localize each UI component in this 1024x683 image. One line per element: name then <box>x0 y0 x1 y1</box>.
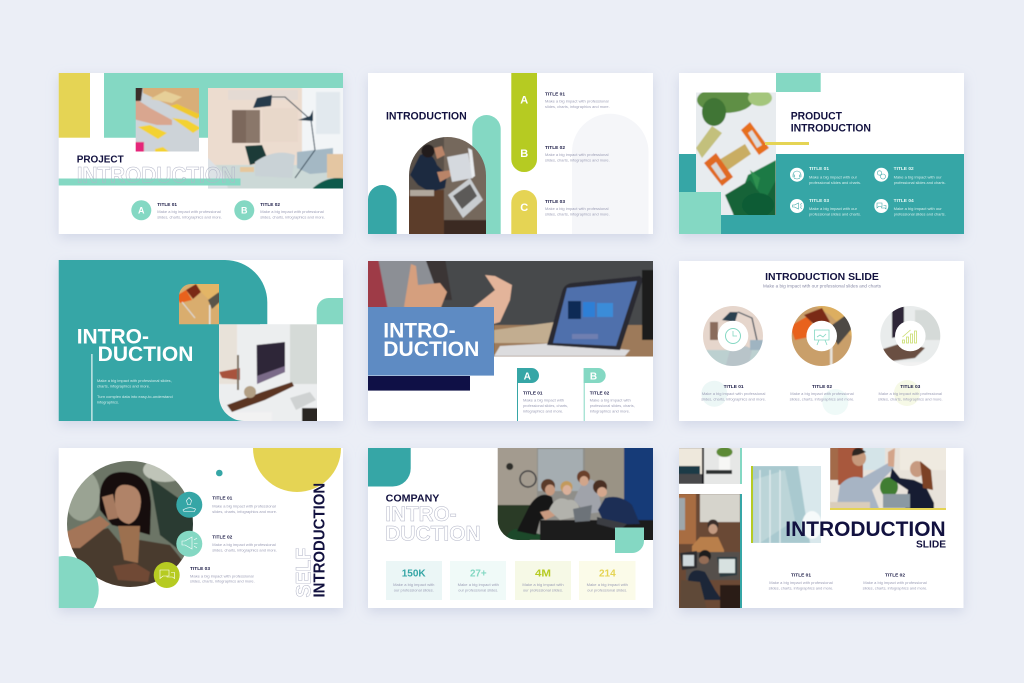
yellow block <box>59 73 90 138</box>
item: title 02: Make a big impact with professional <box>790 391 854 396</box>
item: title 01: Make a big impact with professional <box>157 209 221 214</box>
teal band <box>679 154 964 234</box>
teal dot <box>216 470 223 476</box>
stat card: 27+ <box>450 561 506 600</box>
stat card: 150K <box>386 561 442 600</box>
item: title 03: TITLE 03 <box>900 384 921 389</box>
heading: company intro-duction: COMPANY <box>386 494 440 505</box>
mint block <box>104 73 343 138</box>
heading: INTRODUCTION <box>386 111 467 123</box>
photo: laptop and plant <box>679 448 740 484</box>
heading: PRODUCT <box>791 110 842 122</box>
navy block <box>368 376 470 391</box>
body text: charts, infographics and more. <box>97 383 150 388</box>
heading: outlined introduction: INTRODUCTION <box>77 162 236 187</box>
item: title 02: Make a big impact with professional <box>212 542 276 547</box>
item A text: TITLE 01 <box>523 390 543 396</box>
mint top block <box>776 73 821 92</box>
item: title 02 with gears icon: Make a big impact with our <box>894 174 942 180</box>
item: title 02: slides, charts, infographics and more. <box>790 396 854 402</box>
item A flag <box>517 368 539 421</box>
pill letters: A <box>520 94 528 106</box>
mint stripe <box>740 448 742 484</box>
item: title 02: TITLE 02 <box>812 384 832 389</box>
heading: intro-duction: DUCTION <box>383 338 479 361</box>
stat card: 4M <box>515 561 571 600</box>
item: title 03: slides, charts, infographics and more. <box>545 211 610 216</box>
item: title 02 with gears icon <box>874 166 946 185</box>
subheading: Make a big impact with our professional slides and charts <box>763 283 882 288</box>
item B text: infographics and more. <box>590 408 630 413</box>
item: title 01 with headset icon: TITLE 01 <box>809 166 829 171</box>
mint corner block <box>317 298 343 324</box>
item: title 02: TITLE 02 <box>885 572 905 578</box>
stat card: 150K: 150K <box>402 568 426 579</box>
slide 8 card <box>368 448 653 608</box>
yellow circle <box>253 448 341 492</box>
mint arch <box>472 115 501 234</box>
photo: sticky notes <box>136 88 199 152</box>
item: title 02: TITLE 02 <box>260 202 280 207</box>
heading: intro-duction: DUCTION <box>98 343 193 366</box>
item A text: infographics and more. <box>523 408 563 413</box>
item A flag: A <box>524 372 531 382</box>
item: title 02 <box>212 534 277 552</box>
lime pill <box>511 73 537 172</box>
stat card: 214: our professional slides. <box>587 587 627 592</box>
item: title 01: TITLE 01 <box>724 384 744 389</box>
photo: desk with monitor <box>219 324 317 421</box>
pill letters <box>520 94 528 214</box>
yellow accent bar <box>765 142 809 145</box>
teal corner block <box>368 448 411 486</box>
panel: slide 1 project introduction <box>59 73 346 234</box>
item: title 03 with megaphone icon: TITLE 03 <box>809 198 829 203</box>
item: title 01 <box>157 202 222 219</box>
heading: intro-duction <box>77 325 193 366</box>
item: title 02: slides, charts, infographics and more. <box>545 158 610 162</box>
item: title 01: TITLE 01 <box>545 91 565 96</box>
item: title 03: TITLE 03 <box>545 199 565 204</box>
pill letters: C <box>520 202 528 214</box>
slide 3 card <box>679 73 964 234</box>
body text: Turn complex data into easy-to-understand <box>97 394 173 399</box>
white vertical rule <box>91 354 92 421</box>
stat card: 214 <box>579 561 636 600</box>
item: title 03: Make a big impact with professional <box>190 573 254 578</box>
badge B: B <box>241 206 248 216</box>
item: title 01 <box>701 384 766 402</box>
stat card: 4M: Make a big impact with <box>522 582 564 587</box>
slide 9 card <box>679 448 964 608</box>
panel: slide 3 product introduction <box>679 73 964 234</box>
item: title 03 <box>190 566 255 584</box>
photo circle 2 with presentation icon <box>792 306 852 366</box>
photo: team around laptop <box>495 445 656 543</box>
item B text <box>590 390 635 413</box>
item: title 02: Make a big impact with professional <box>863 580 927 585</box>
slide 6 card <box>679 261 964 421</box>
body text: infographics. <box>97 399 119 404</box>
heading: company intro-duction: INTRO- <box>385 502 457 526</box>
item: title 01: TITLE 01 <box>791 572 811 578</box>
badge A <box>131 200 151 220</box>
item: title 03: Make a big impact with professional <box>879 391 942 396</box>
slide 5 card <box>368 261 653 421</box>
item A text: professional slides, charts, <box>523 403 568 408</box>
item: title 01: slides, charts, infographics and more. <box>545 104 610 109</box>
item: title 01: slides, charts, infographics and more. <box>212 509 277 514</box>
panel: slide 2 introduction <box>368 73 653 237</box>
item: title 01 <box>769 572 833 590</box>
item B flag: B <box>590 372 597 382</box>
badge A: A <box>138 206 145 216</box>
stat card: 4M: our professional slides. <box>523 587 563 592</box>
item: title 01: TITLE 01 <box>212 496 233 500</box>
heading: INTRODUCTION <box>791 122 871 134</box>
item: title 01: slides, charts, infographics and more. <box>157 214 222 219</box>
item: title 02: Make a big impact with professional <box>260 209 324 214</box>
icon: teal yoga badge <box>176 492 202 518</box>
pale arch <box>572 114 648 234</box>
item: title 03 <box>545 199 610 216</box>
stat card: 27+: Make a big impact with <box>458 582 499 587</box>
item: title 04 with chat icon: professional slides and charts. <box>894 211 946 216</box>
photo: woman portrait circle <box>67 461 193 587</box>
heading: introduction slide: INTRODUCTION <box>785 518 946 541</box>
item B text: Make a big impact with <box>590 398 631 402</box>
item: title 03: slides, charts, infographics and more. <box>190 579 255 584</box>
item: title 02: TITLE 02 <box>545 145 565 150</box>
item: title 01 with headset icon <box>790 166 861 185</box>
item: title 02: Make a big impact with professional <box>545 152 609 157</box>
stat card: 150K: Make a big impact with <box>393 582 434 587</box>
stat card: 27+: 27+ <box>470 568 487 579</box>
stat card: 214: Make a big impact with <box>587 582 628 587</box>
stat card: 4M: 4M <box>535 568 551 579</box>
mint circle <box>58 556 99 608</box>
item B text: TITLE 02 <box>590 390 610 396</box>
item: title 01 with headset icon: Make a big impact with our <box>809 174 858 180</box>
item: title 01: Make a big impact with professional <box>545 99 609 104</box>
heading: project: PROJECT <box>77 154 124 165</box>
yellow stripe <box>830 508 946 510</box>
item: title 03: Make a big impact with professional <box>545 206 609 211</box>
slide 7 card <box>59 448 343 608</box>
item: title 03 with megaphone icon: Make a big impact with our <box>809 206 858 211</box>
item: title 01: Make a big impact with professional <box>769 580 833 585</box>
photo: laptops on table arch <box>409 137 486 234</box>
photo: two people at laptops <box>679 494 740 608</box>
item: title 02 <box>260 202 325 219</box>
item: title 02: TITLE 02 <box>212 534 233 540</box>
panel: slide 6 introduction slide <box>679 261 964 421</box>
panel: slide 4 intro-duction <box>59 260 343 424</box>
pale decorative circles <box>701 380 920 415</box>
panel: slide 8 company intro-duction <box>368 445 656 608</box>
item: title 01 with headset icon: professional slides and charts. <box>809 180 861 185</box>
item: title 01 <box>212 496 277 514</box>
item: title 01: Make a big impact with professional <box>702 391 765 396</box>
item: title 02: slides, charts, infographics and more. <box>863 585 927 590</box>
mint corner block <box>615 528 644 553</box>
photo: hands and laptop <box>365 258 656 360</box>
heading: company intro-duction: DUCTION <box>385 522 481 546</box>
slide 1 card <box>59 73 343 234</box>
photo: orange chair on wood floor <box>179 284 219 324</box>
item: title 04 with chat icon: TITLE 04 <box>894 198 914 203</box>
item: title 04 with chat icon: Make a big impact with our <box>894 206 942 211</box>
photo: juice bottles and plants <box>696 92 776 215</box>
vertical heading: self: SELF <box>291 548 315 598</box>
lime stripe <box>751 466 753 543</box>
stat card: 214: 214 <box>599 568 616 579</box>
heading <box>791 110 871 134</box>
teal rounded shape <box>59 260 267 421</box>
item: title 01: TITLE 01 <box>157 202 177 207</box>
panel: slide 7 self introduction <box>56 448 346 615</box>
photo circle 3 with growth chart icon <box>880 306 940 366</box>
pill letters: B <box>520 148 528 160</box>
stat card: 150K: our professional slides. <box>394 587 434 592</box>
item: title 02: slides, charts, infographics and more. <box>260 214 325 219</box>
item: title 02 <box>790 384 854 402</box>
body text <box>97 378 173 404</box>
icon: lime chat badge <box>154 562 180 588</box>
teal arch <box>368 185 397 234</box>
photo: glass building <box>753 466 821 543</box>
item A text: Make a big impact with <box>523 398 564 402</box>
photo circle 1 with clock icon <box>703 306 763 366</box>
slide 2 card <box>368 73 653 234</box>
item: title 02: slides, charts, infographics and more. <box>212 547 277 552</box>
item: title 01: slides, charts, infographics and more. <box>769 585 833 590</box>
heading: INTRODUCTION SLIDE <box>765 272 879 283</box>
item: title 02 with gears icon: professional slides and charts. <box>894 180 946 185</box>
stat card: 27+: our professional slides. <box>458 587 498 592</box>
heading: intro-duction <box>383 319 479 361</box>
item: title 03 with megaphone icon: professional slides and charts. <box>809 211 861 216</box>
teal stripe <box>740 494 742 608</box>
item: title 02 with gears icon: TITLE 02 <box>894 166 914 171</box>
heading: introduction slide: SLIDE <box>916 540 946 551</box>
blue title block <box>368 307 494 376</box>
item: title 03: slides, charts, infographics and more. <box>878 396 943 402</box>
vertical heading: introduction: INTRODUCTION <box>311 483 328 598</box>
item: title 03 with megaphone icon <box>790 198 861 216</box>
panel: slide 9 introduction slide with photos <box>676 445 964 611</box>
item: title 04 with chat icon <box>874 198 946 216</box>
item B text: professional slides, charts, <box>590 403 635 408</box>
item: title 03: TITLE 03 <box>190 566 210 571</box>
panel: slide 5 intro-duction with laptop <box>365 258 656 421</box>
heading: intro-duction: INTRO- <box>383 319 456 342</box>
photo: colleagues high five <box>830 448 946 508</box>
heading: company intro-duction <box>385 494 481 546</box>
item: title 01: Make a big impact with professional <box>212 504 276 508</box>
icon: mint megaphone badge <box>176 531 202 557</box>
item B flag <box>584 368 606 421</box>
yellow pill <box>511 190 537 234</box>
heading: intro-duction: INTRO- <box>77 325 149 348</box>
item A text <box>523 390 568 413</box>
slide 4 card <box>59 260 343 421</box>
mint lower block <box>679 192 721 234</box>
badge B <box>234 200 254 220</box>
item: title 01 <box>545 91 610 109</box>
mint band <box>59 178 241 186</box>
item: title 02 <box>863 572 927 590</box>
photo: office room with lamp <box>205 85 346 191</box>
body text: Make a big impact with professional slides, <box>97 378 172 383</box>
item: title 01: slides, charts, infographics and more. <box>701 396 766 402</box>
item: title 03 <box>878 384 943 402</box>
item: title 02 <box>545 145 610 162</box>
